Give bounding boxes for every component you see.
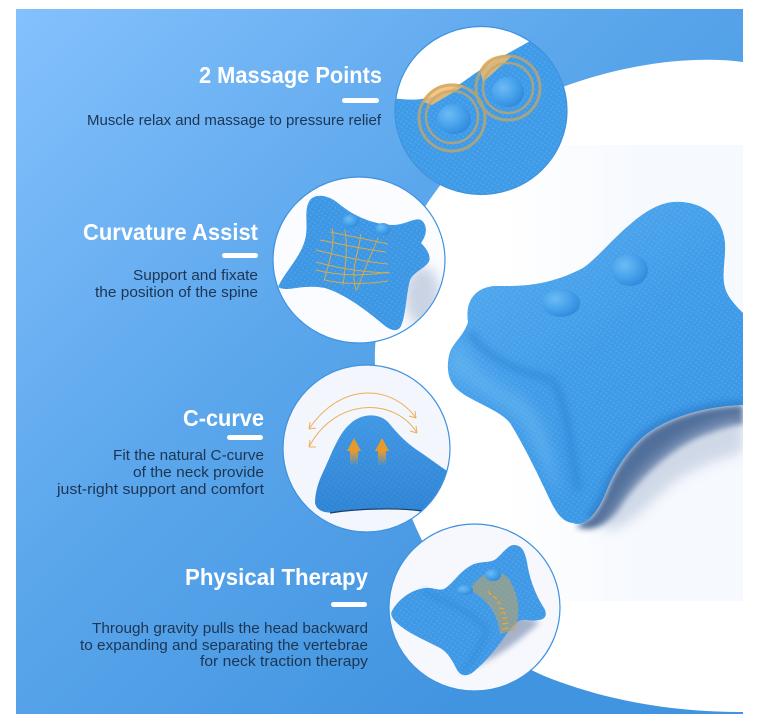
divider bar (222, 253, 258, 258)
heading: 2 Massage Points (199, 62, 382, 88)
block: Curvature Assist (83, 219, 258, 301)
description: the position of the spine (95, 285, 258, 301)
divider bar (227, 435, 263, 440)
circle 3: c-curve (283, 365, 452, 532)
block: C-curve (56, 405, 264, 498)
heading: Curvature Assist (83, 219, 258, 245)
curved arrows (309, 393, 417, 447)
description (80, 621, 369, 670)
description: Support and fixate (133, 268, 258, 284)
heading: C-curve (183, 405, 264, 431)
description (95, 268, 258, 301)
grid of orange lines (316, 228, 390, 290)
main product image (440, 195, 745, 530)
divider bar (342, 98, 379, 103)
massage bumps (542, 254, 648, 317)
block: 2 Massage Points (87, 62, 382, 129)
description: to expanding and separating the vertebrae (80, 638, 368, 654)
circle 1: massage points (390, 26, 575, 200)
description: Through gravity pulls the head backward (92, 621, 368, 637)
description: of the neck provide (133, 465, 264, 481)
up arrows (347, 438, 389, 466)
description (56, 448, 264, 498)
heading: Physical Therapy (185, 564, 368, 590)
block: Physical Therapy (80, 564, 369, 670)
divider bar (331, 602, 367, 607)
description: for neck traction therapy (200, 654, 369, 670)
circle 2: curvature assist (273, 177, 445, 343)
traction overlay (470, 572, 518, 634)
description: Fit the natural C-curve (113, 448, 264, 464)
description: just-right support and comfort (56, 482, 264, 498)
description: Muscle relax and massage to pressure relief (87, 113, 382, 129)
circle 4: physical therapy (389, 524, 560, 691)
